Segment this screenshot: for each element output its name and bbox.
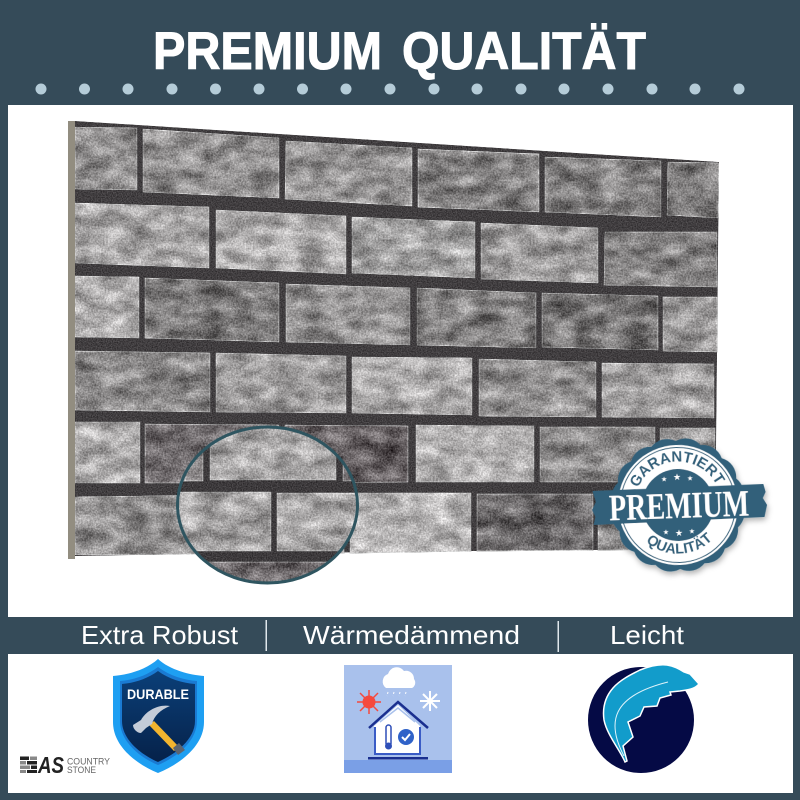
badge upper text: GARANTIERT	[630, 450, 726, 486]
dotted row under title	[36, 84, 744, 94]
divider 2	[558, 621, 559, 652]
feature label: Leicht: Leicht	[610, 620, 685, 650]
logo: AS Country Stone	[20, 752, 111, 778]
badge stars: ★	[661, 475, 667, 484]
divider 1	[266, 620, 267, 651]
badge stars: ★	[673, 472, 681, 482]
brick row 4	[75, 351, 714, 418]
logo: AS Country Stone: STONE	[67, 765, 96, 776]
badge lower text: QUALITÄT	[648, 532, 710, 554]
badge ribbon text: PREMIUM	[608, 484, 750, 529]
panel: feature icons	[8, 654, 793, 793]
panel edge strip of wall board	[68, 121, 75, 559]
icon: feather	[588, 665, 699, 773]
badge stars: ★	[689, 527, 695, 536]
premium badge	[592, 438, 771, 578]
logo: AS Country Stone: AS	[37, 752, 65, 778]
badge scalloped seal	[609, 436, 747, 574]
panel: product image	[8, 105, 793, 617]
badge stars: ★	[687, 474, 693, 483]
brick row 2	[75, 203, 717, 287]
brick row 3	[75, 276, 717, 352]
mortar backing of brick wall	[75, 121, 719, 556]
badge stars	[661, 471, 695, 539]
badge inner disc	[641, 468, 715, 542]
title: PREMIUM	[153, 22, 382, 81]
logo: AS Country Stone: COUNTRY	[67, 756, 111, 768]
feature label: Extra Robust: Extra Robust	[81, 620, 239, 650]
brick row 6	[75, 493, 715, 555]
badge white ring	[616, 443, 740, 567]
title: QUALITÄT	[402, 22, 646, 81]
brick row 1	[75, 127, 719, 218]
badge stars: ★	[663, 528, 669, 537]
title	[153, 22, 646, 81]
feature label: Wärmedämmend: Wärmedämmend	[303, 620, 520, 650]
icon: thermal insulation house	[344, 665, 452, 773]
badge ribbon	[591, 484, 768, 525]
magnifier lens	[170, 420, 363, 586]
brick wall	[75, 127, 719, 555]
icon: durable shield	[113, 659, 204, 773]
icon: durable shield: DURABLE	[127, 686, 189, 702]
badge stars: ★	[675, 528, 683, 538]
brick row 5	[75, 422, 715, 483]
